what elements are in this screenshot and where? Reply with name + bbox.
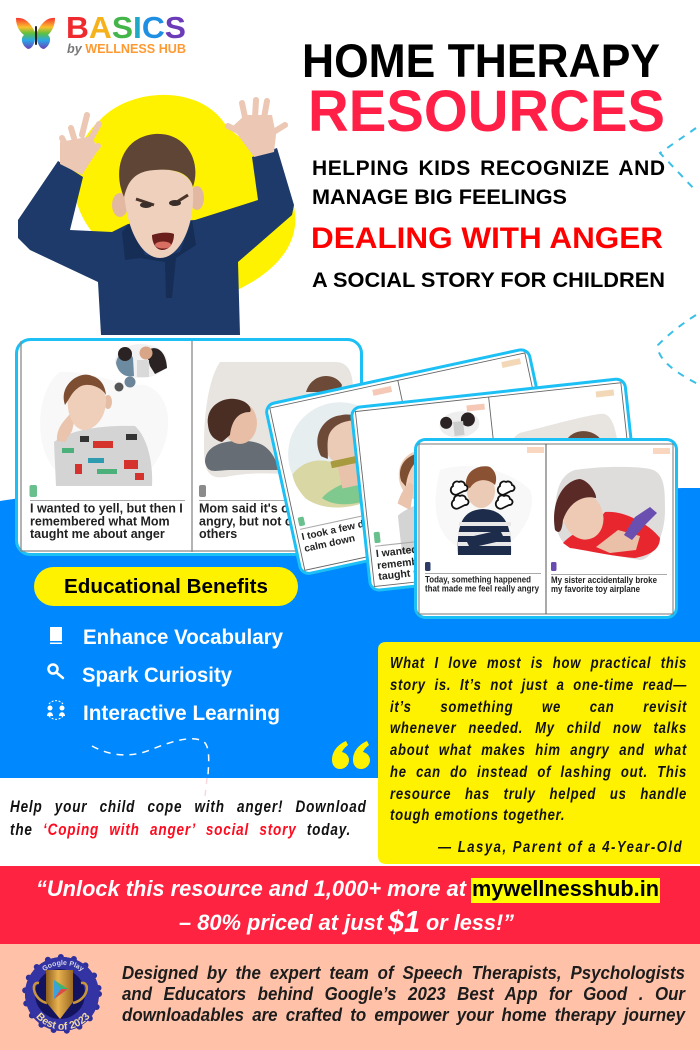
footer text: downloadables are crafted to empower your home therapy journey [122, 1005, 685, 1025]
caption: taught me about anger [30, 527, 165, 541]
footer text [122, 963, 686, 1025]
card frame [265, 348, 565, 575]
card frame [16, 340, 362, 554]
image: calm boy [278, 392, 402, 517]
caption: angry, but not okay to hurt [199, 514, 357, 528]
testimonial text: story is. It’s not just a one-time read— [390, 677, 687, 694]
title line 2: RESOURCES [308, 79, 665, 144]
caption: calm down [303, 533, 356, 555]
icon: magnifier [48, 664, 63, 678]
logo byline: by WELLNESS HUB [67, 41, 186, 56]
footer text: Designed by the expert team of Speech Therapists, Psychologists [122, 963, 685, 983]
thought bubble [114, 344, 167, 392]
caption left [425, 574, 540, 594]
icon: quotation marks [332, 741, 370, 769]
caption right: my favorite toy airplane [551, 584, 640, 595]
caption: remembered what Mom [30, 514, 170, 528]
testimonial text: — Lasya, Parent of a 4-Year-Old [438, 839, 683, 856]
banner line 2: $1 [387, 904, 420, 939]
caption left: that made me feel really angry [425, 584, 540, 594]
eyes [136, 195, 188, 205]
decorative dashed lines [658, 128, 698, 384]
footer background [0, 944, 700, 1050]
tab [374, 532, 381, 543]
yellow blob behind boy [73, 95, 295, 291]
hand right [228, 100, 285, 133]
icon: interactive people [47, 701, 65, 719]
caption: remembered what Mom [377, 547, 494, 572]
icon: butterfly [16, 18, 55, 49]
banner line 2: or less!” [426, 910, 514, 935]
subtitle: MANAGE BIG FEELINGS [312, 186, 567, 209]
hair [119, 134, 195, 197]
logo [16, 10, 186, 56]
quote box [378, 642, 700, 864]
badge: Google Play best of 2023 [22, 954, 102, 1034]
testimonial text: tough emotions together. [390, 807, 565, 824]
story card 3 [351, 378, 644, 591]
tab [199, 485, 206, 497]
testimonial text: he can do instead of lashing out. This [390, 764, 687, 781]
caption: I wanted to yell, but then I [30, 502, 183, 516]
benefit: interactive: Interactive Learning [83, 702, 280, 725]
caption: I took a few deep breaths to [301, 504, 432, 543]
testimonial text: whenever needed. My child now talks [390, 720, 687, 737]
mini logos [527, 447, 544, 453]
call to action text [10, 798, 367, 839]
image: mom and boy [503, 412, 622, 491]
website name: mywellnesshub.in [472, 876, 659, 901]
story card 1 [16, 340, 362, 554]
testimonial text: about what makes him angry and what [390, 742, 687, 759]
title line 1: HOME THERAPY [302, 34, 660, 87]
testimonial text: resource has truly helped us handle [390, 786, 687, 803]
benefit: curiosity: Spark Curiosity [82, 664, 232, 687]
dashed arrow [92, 739, 209, 775]
caption left: Today, something happened [425, 574, 531, 586]
call to action text: the ‘Coping with anger’ social story today. [10, 821, 351, 839]
caption right [551, 575, 657, 595]
testimonial text [390, 655, 687, 856]
caption: taught me about anger [378, 559, 492, 583]
image: arms-crossed boy [436, 466, 532, 555]
red banner [0, 866, 700, 944]
hand left [62, 115, 99, 153]
tabs [425, 562, 430, 571]
footer text: and Educators behind Google’s 2023 Best App for Good . Our [122, 984, 685, 1004]
tab [298, 516, 305, 526]
benefits list [47, 626, 283, 725]
image: thinking boy [391, 448, 457, 553]
icon: book [50, 627, 62, 644]
social story label: A SOCIAL STORY FOR CHILDREN [312, 269, 665, 292]
banner line 2: – 80% priced at just [179, 910, 385, 935]
badge: Google Play best of 2023: Best of 2023 [36, 1012, 90, 1030]
badge text: Google Play [42, 960, 84, 972]
subtitle [312, 157, 665, 209]
caption: I wanted to yell, but then I [375, 534, 504, 560]
tab [30, 485, 37, 497]
photo: angry boy [18, 100, 294, 335]
thought bubble [438, 409, 481, 439]
website highlight [471, 878, 660, 903]
card frame [351, 378, 644, 591]
image: girl with toy [554, 467, 665, 560]
benefit: vocabulary: Enhance Vocabulary [83, 626, 283, 649]
story card 2 [265, 348, 565, 575]
caption right: My sister accidentally broke [551, 575, 657, 586]
trophy [34, 983, 87, 1003]
boy sweater [18, 148, 294, 335]
blue background section [0, 488, 700, 778]
subtitle: HELPING KIDS RECOGNIZE AND [312, 157, 665, 180]
pill: educational benefits: Educational Benefits [64, 575, 268, 598]
call to action text: Help your child cope with anger! Download [10, 798, 367, 816]
caption: others [199, 527, 237, 541]
image: mom and boy [204, 362, 353, 482]
collar [122, 220, 196, 298]
heading: dealing with anger: DEALING WITH ANGER [311, 222, 663, 255]
mini logo [372, 386, 392, 396]
image: thinking boy [40, 372, 168, 486]
testimonial text: it’s something we can revisit [390, 699, 687, 716]
banner line 2 [179, 904, 514, 939]
mini logo [466, 404, 485, 411]
mouth [152, 233, 174, 250]
icon: steam clouds [451, 481, 515, 509]
pill: educational benefits [34, 567, 298, 606]
face [112, 193, 128, 217]
card frame [416, 440, 676, 618]
story card 4 [416, 440, 676, 618]
logo wordmark: BASICS [66, 10, 186, 45]
testimonial text: What I love most is how practical this [390, 655, 687, 672]
caption: Mom said it's okay to be [199, 502, 343, 516]
banner line 1: “Unlock this resource and 1,000+ more at [36, 876, 468, 901]
